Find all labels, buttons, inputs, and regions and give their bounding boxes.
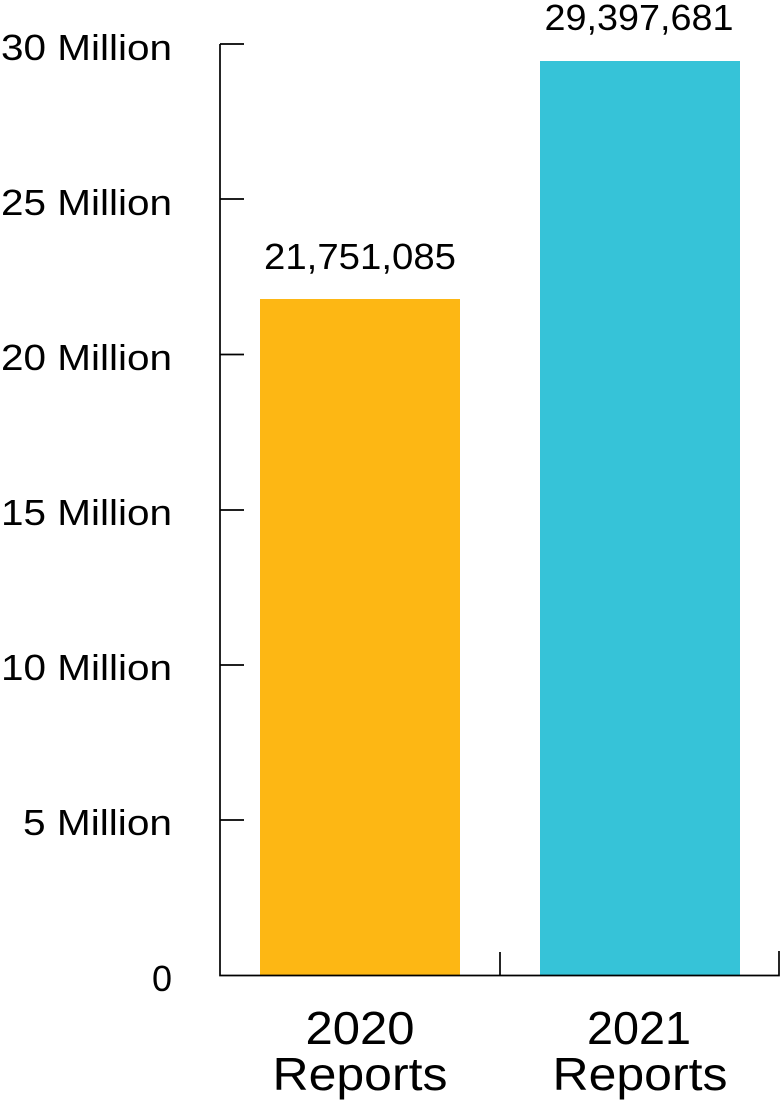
y-axis labels: 30 Million	[1, 27, 172, 68]
value label: 2020: 21,751,085	[264, 236, 456, 277]
y-axis labels	[1, 27, 172, 999]
bar: 2020 reports	[260, 299, 460, 975]
y-axis labels: 10 Million	[1, 647, 172, 688]
y-axis labels: 25 Million	[1, 182, 172, 223]
bar: 2021 reports	[540, 61, 740, 975]
y-axis labels: 20 Million	[1, 337, 172, 378]
y-axis labels: 15 Million	[1, 492, 172, 533]
category label: 2020 Reports	[272, 1002, 448, 1100]
category label: 2021 Reports: Reports	[552, 1048, 728, 1100]
category label: 2021 Reports: 2021	[587, 1002, 691, 1054]
axis lines and ticks	[220, 44, 779, 976]
category label: 2020 Reports: 2020	[306, 1002, 414, 1054]
category label: 2021 Reports	[552, 1002, 728, 1100]
y-axis labels: 0	[152, 958, 172, 999]
category label: 2020 Reports: Reports	[272, 1048, 448, 1100]
y-axis labels: 5 Million	[23, 802, 172, 843]
